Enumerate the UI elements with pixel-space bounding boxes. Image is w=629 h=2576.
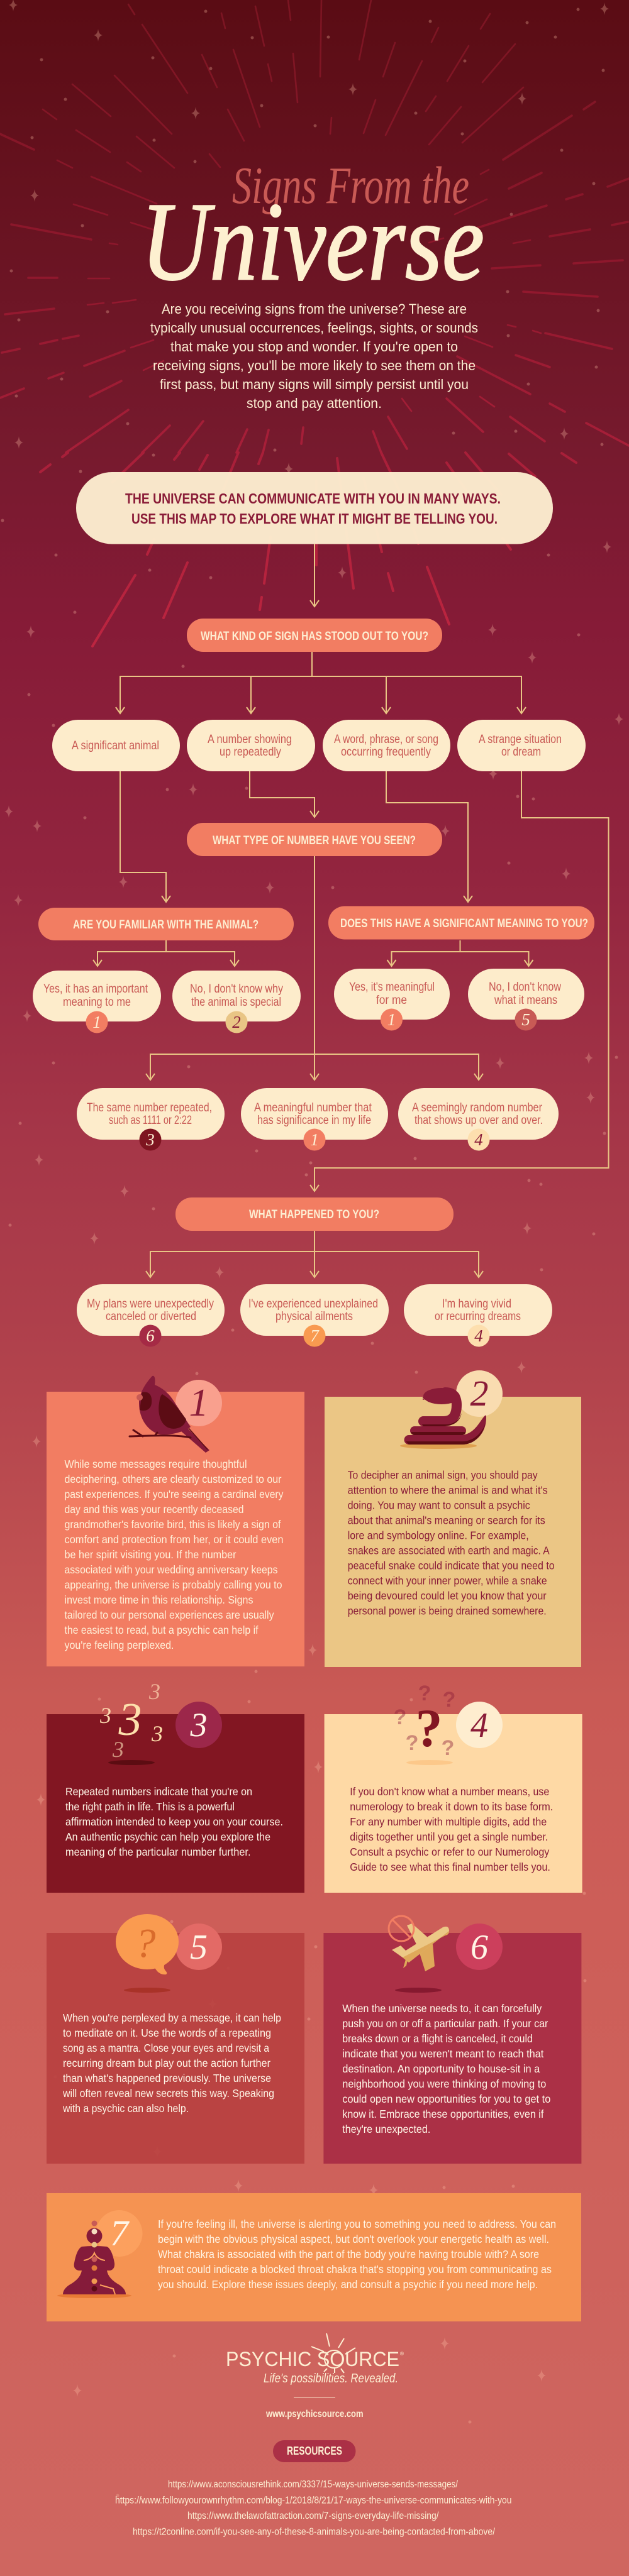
logo: Psychic Source: PSYCHIC SOURCE xyxy=(226,2348,399,2370)
panel 2 text: personal power is being drained somewhere. xyxy=(348,1605,547,1617)
question: what type of number: WHAT TYPE OF NUMBER HAVE YOU SEEN? xyxy=(213,834,416,847)
option: a seemingly random number xyxy=(398,1088,559,1150)
icon: coiled snake xyxy=(400,1388,486,1449)
option: yes, it's meaningful for me: 1 xyxy=(387,1010,396,1029)
option: yes, it has an important meaning: Yes, it has an important xyxy=(43,983,148,996)
icon: floating threes: 3 xyxy=(118,1694,142,1746)
option: a strange situation or dream: A strange situation xyxy=(479,733,562,746)
option: no, I don't know what it means xyxy=(468,969,584,1031)
question: what kind of sign: WHAT KIND OF SIGN HAS STOOD OUT TO YOU? xyxy=(201,630,428,643)
option: no, I don't know what it means: what it means xyxy=(494,994,557,1007)
panel 3 text: the right path in life. This is a powerful xyxy=(65,1800,235,1813)
icon: cardinal on a branch xyxy=(130,1376,209,1453)
logo: Psychic Source: Life's possibilities. Revealed. xyxy=(264,2372,398,2386)
badge 7: 7 xyxy=(110,2213,130,2254)
callout: map introduction: THE UNIVERSE CAN COMMUNICATE WITH YOU IN MANY WAYS. xyxy=(125,490,501,507)
arrows: sign type branches xyxy=(116,652,526,713)
option: unexplained physical ailments: physical ailments xyxy=(276,1310,353,1323)
panel 1 text: tailored to our personal experiences are usually xyxy=(64,1609,274,1621)
option: vivid or recurring dreams: I'm having vivid xyxy=(442,1297,511,1311)
option: the same number repeated: such as 1111 or 2:22 xyxy=(109,1114,192,1127)
badge 3: 3 xyxy=(190,1706,208,1744)
panel 2 text: connect with your inner power, while a snake xyxy=(348,1575,547,1587)
option: the same number repeated: 3 xyxy=(145,1130,155,1149)
panel 3 text: meaning of the particular number further. xyxy=(65,1846,250,1858)
arrow: number to number type question xyxy=(250,771,319,817)
icon: floating question marks: ? xyxy=(406,1731,418,1755)
icon: floating question marks: ? xyxy=(443,1688,455,1712)
panel 7: feeling ill xyxy=(47,2193,581,2321)
option: no, I don't know why the animal is special: No, I don't know why xyxy=(190,983,283,996)
panel 1 text: appearing, the universe is probably calling you to xyxy=(64,1578,282,1591)
panel 7 text: begin with the obvious physical aspect, but don't overlook your energetic health as well. xyxy=(158,2233,549,2245)
icon: floating question marks: ? xyxy=(418,1682,431,1705)
logo: Psychic Source xyxy=(226,2333,404,2386)
arrows: number type branches xyxy=(146,856,483,1080)
question: what type of number xyxy=(187,823,442,856)
background: radiating rays xyxy=(0,0,629,646)
panel 6 text: know it. Embrace these opportunities, even if xyxy=(342,2108,543,2120)
option: my plans were canceled: 6 xyxy=(146,1326,155,1345)
option: a number showing up repeatedly: A number showing xyxy=(208,733,292,746)
panel 6 text: push you on or off a particular path. If your car xyxy=(342,2017,548,2030)
panel 2 text: snakes are associated with earth and magic. A xyxy=(348,1544,550,1557)
panel 2 text: doing. You may want to consult a psychic xyxy=(348,1499,530,1512)
icon: floating question marks: ? xyxy=(415,1698,443,1758)
panel 6 text: neighborhood you were thinking of moving to xyxy=(342,2078,546,2090)
panel 2 text: lore and symbology online. For example, xyxy=(348,1529,529,1542)
panel 4 text: For any number with multiple digits, add the xyxy=(350,1815,547,1828)
option: a meaningful number: 1 xyxy=(310,1130,319,1149)
panel 2 text: being devoured could let you know that your xyxy=(348,1590,547,1602)
option: a meaningful number: has significance in my life xyxy=(257,1114,371,1127)
option: no, I don't know why the animal is special xyxy=(172,971,301,1033)
option: a word, phrase, or song: A word, phrase, or song xyxy=(334,733,438,746)
title: Signs From the Universe: Universe xyxy=(141,179,484,304)
panel 4: unknown number xyxy=(325,1682,582,1893)
question: are you familiar with the animal: ARE YOU FAMILIAR WITH THE ANIMAL? xyxy=(73,918,259,932)
option: unexplained physical ailments: 7 xyxy=(310,1326,320,1345)
badge 2 xyxy=(456,1370,503,1417)
badge 4: 4 xyxy=(470,1706,488,1745)
icon: floating threes: 3 xyxy=(112,1737,124,1762)
intro paragraph: stop and pay attention. xyxy=(247,395,382,411)
option: yes, it has an important meaning: meaning to me xyxy=(63,996,131,1009)
option: yes, it has an important meaning xyxy=(33,971,161,1033)
arrow: strange situation to what happened xyxy=(310,771,609,1191)
arrows: familiarity branches xyxy=(93,940,239,966)
panel 1 text xyxy=(64,1458,284,1651)
badge 1: 1 xyxy=(189,1382,209,1424)
option: a seemingly random number: A seemingly random number xyxy=(412,1101,543,1115)
icon: meditating figure with chakras xyxy=(57,2220,131,2298)
option: yes, it has an important meaning: 1 xyxy=(92,1013,101,1032)
icon: floating question marks: ? xyxy=(442,1736,454,1760)
option: no, I don't know what it means: No, I don't know xyxy=(489,981,561,994)
option: a number showing up repeatedly xyxy=(187,720,315,771)
option: my plans were canceled: canceled or diverted xyxy=(106,1310,196,1323)
panel 1 text: be her spirit visiting you. If the number xyxy=(64,1548,237,1561)
panel 4 text: If you don't know what a number means, use xyxy=(350,1785,549,1798)
icon: floating question marks: ? xyxy=(394,1705,406,1729)
badge 2: 2 xyxy=(470,1373,488,1414)
panel 1 text: invest more time in this relationship. Signs xyxy=(64,1593,253,1606)
option: my plans were canceled xyxy=(77,1284,225,1346)
icon: cancelled airplane xyxy=(389,1916,449,1993)
icon: speech bubble with question mark: ? xyxy=(135,1920,156,1966)
panel 6 text: When the universe needs to, it can forcefully xyxy=(342,2002,542,2015)
option: the same number repeated: The same number repeated, xyxy=(87,1101,212,1115)
intro paragraph: first pass, but many signs will simply persist until you xyxy=(160,377,469,392)
question: does this have a significant meaning xyxy=(328,906,594,939)
badge 6 xyxy=(456,1924,503,1970)
question: are you familiar with the animal xyxy=(38,908,294,940)
panel 5 text: will often reveal new secrets this way. Speaking xyxy=(62,2087,274,2100)
option: no, I don't know why the animal is special: 2 xyxy=(232,1013,241,1032)
option: yes, it's meaningful for me xyxy=(334,969,450,1031)
panel 6: forceful redirection xyxy=(323,1916,581,2164)
icon: floating threes: 3 xyxy=(148,1679,160,1704)
panel 2 text: peaceful snake could indicate that you need to xyxy=(348,1560,555,1572)
option: a significant animal: A significant animal xyxy=(72,739,159,752)
panel 5 text: to meditate on it. Use the words of a repeating xyxy=(63,2027,271,2039)
option: a significant animal xyxy=(52,720,180,771)
panel 7 text: What chakra is associated with the part of the body you're having trouble with? A sore xyxy=(158,2248,539,2260)
panel 6 text xyxy=(342,2002,550,2135)
panel 2 text: attention to where the animal is and what it's xyxy=(348,1484,548,1497)
option: yes, it's meaningful for me: Yes, it's meaningful xyxy=(349,981,435,994)
badge 1 xyxy=(175,1380,222,1426)
panel 1 text: past experiences. If you're seeing a cardinal every xyxy=(64,1488,284,1500)
resources list: https://www.aconsciousrethink.com/3337/15-ways-universe-sends-messages/ xyxy=(168,2479,458,2490)
option: a strange situation or dream: or dream xyxy=(501,746,541,759)
panel 5 text: with a psychic can also help. xyxy=(62,2102,189,2115)
panel 3: repeated numbers xyxy=(47,1679,304,1893)
intro paragraph: that make you stop and wonder. If you're open to xyxy=(170,339,458,355)
badge 5 xyxy=(175,1924,222,1970)
badge 4 xyxy=(456,1702,503,1748)
panel 5 text: song as a mantra. Close your eyes and revisit a xyxy=(63,2042,269,2054)
panel 3 text: affirmation intended to keep you on your course. xyxy=(65,1815,283,1828)
panel 6 text: they're unexpected. xyxy=(342,2123,430,2135)
resources list xyxy=(115,2479,512,2537)
panel 1 text: deciphering, others are clearly customized to our xyxy=(64,1473,282,1485)
option: a word, phrase, or song xyxy=(323,720,450,771)
panel 1 text: day and this was your recently deceased xyxy=(64,1503,244,1516)
panel 7 text xyxy=(158,2218,556,2291)
icon: floating question marks xyxy=(394,1682,455,1765)
option: the same number repeated xyxy=(77,1088,225,1150)
icon: floating threes: 3 xyxy=(99,1703,111,1728)
badge 3 xyxy=(175,1702,222,1748)
arrow: animal to familiarity question xyxy=(120,771,170,902)
badge 6: 6 xyxy=(470,1928,488,1967)
panel 6 text: indicate that you weren't meant to reach that xyxy=(342,2047,543,2060)
intro paragraph xyxy=(150,301,478,411)
panel 7 text: If you're feeling ill, the universe is alerting you to something you need to address. You can xyxy=(158,2218,556,2230)
panel 4 text: Consult a psychic or refer to our Numerology xyxy=(350,1846,550,1858)
option: a number showing up repeatedly: up repeatedly xyxy=(220,746,281,759)
panel 3 text: Repeated numbers indicate that you're on xyxy=(65,1785,252,1798)
resources list: https://www.followyourownrhythm.com/blog-1/2018/8/21/17-ways-the-universe-communicates-with-you xyxy=(115,2496,512,2506)
option: vivid or recurring dreams: or recurring dreams xyxy=(435,1310,521,1323)
panel 1: cardinal xyxy=(47,1376,304,1666)
logo: Psychic Source: ® xyxy=(400,2351,404,2357)
resources list: https://t2conline.com/if-you-see-any-of-these-8-animals-you-are-being-contacted-from-above/ xyxy=(133,2527,495,2537)
panel 1 text: you're feeling perplexed. xyxy=(64,1639,174,1651)
option: a seemingly random number: 4 xyxy=(474,1130,483,1149)
website address: www.psychicsource.com xyxy=(265,2409,364,2419)
arrows: meaning branches xyxy=(387,940,533,966)
option: my plans were canceled: My plans were unexpectedly xyxy=(87,1297,214,1311)
resources list: https://www.thelawofattraction.com/7-signs-everyday-life-missing/ xyxy=(187,2511,439,2521)
resources heading: RESOURCES xyxy=(287,2445,342,2457)
panel 1 text: associated with your wedding anniversary keeps xyxy=(64,1563,278,1576)
arrow: word to meaning question xyxy=(386,771,472,902)
arrow: intro to first question xyxy=(310,544,319,607)
option: a word, phrase, or song: occurring frequently xyxy=(341,746,431,759)
option: vivid or recurring dreams xyxy=(404,1284,552,1346)
option: no, I don't know what it means: 5 xyxy=(521,1010,530,1029)
panel 7 text: you should. Explore these issues deeply, and consult a psychic if you need more help. xyxy=(158,2278,538,2291)
panel 5 text: recurring dream but play out the action further xyxy=(63,2057,270,2069)
option: no, I don't know why the animal is special: the animal is special xyxy=(191,996,281,1009)
intro paragraph: receiving signs, you'll be more likely to see them on the xyxy=(153,358,476,373)
callout: map introduction xyxy=(76,472,553,544)
panel 2 text: about that animal's meaning or search for its xyxy=(348,1514,545,1527)
intro paragraph: Are you receiving signs from the universe? These are xyxy=(162,301,467,317)
icon: speech bubble with question mark xyxy=(116,1914,179,1993)
question: what happened to you xyxy=(175,1197,454,1231)
option: unexplained physical ailments xyxy=(240,1284,389,1346)
badge 5: 5 xyxy=(190,1928,208,1967)
panel 2 text: To decipher an animal sign, you should pay xyxy=(348,1469,538,1482)
panel 5: perplexed by a message xyxy=(47,1914,304,2164)
panel 1 text: comfort and protection from her, or it could even xyxy=(64,1533,283,1546)
panel 5 text: When you're perplexed by a message, it can help xyxy=(63,2012,281,2024)
panel 1 text: grandmother's favorite bird, this is likely a sign of xyxy=(64,1518,281,1531)
panel 5 text: than what's happened previously. The universe xyxy=(63,2072,271,2084)
question: what kind of sign xyxy=(187,619,442,652)
panel 2 text xyxy=(348,1469,555,1617)
panel 6 text: destination. An opportunity to house-sit in a xyxy=(342,2062,540,2075)
option: a meaningful number: A meaningful number that xyxy=(254,1101,372,1115)
option: yes, it's meaningful for me: for me xyxy=(376,994,407,1007)
panel 3 text: An authentic psychic can help you explore the xyxy=(65,1830,270,1843)
title: Signs From the Universe: Signs From the xyxy=(232,157,469,215)
panel 1 text: While some messages require thoughtful xyxy=(64,1458,247,1470)
panel 3 text xyxy=(65,1785,283,1858)
panel 4 text: digits together until you get a single number. xyxy=(350,1830,548,1843)
panel 2: snake xyxy=(325,1370,581,1667)
arrows: what happened branches xyxy=(146,1231,483,1277)
panel 4 text xyxy=(350,1785,553,1873)
option: vivid or recurring dreams: 4 xyxy=(474,1326,483,1345)
badge 7 xyxy=(96,2210,142,2257)
panel 4 text: numerology to break it down to its base form. xyxy=(350,1800,553,1813)
icon: floating threes: 3 xyxy=(151,1721,163,1746)
panel 1 text: the easiest to read, but a psychic can help if xyxy=(64,1624,259,1636)
option: a meaningful number xyxy=(241,1088,388,1150)
panel 4 text: Guide to see what this final number tells you. xyxy=(350,1861,550,1873)
intro paragraph: typically unusual occurrences, feelings, sights, or sounds xyxy=(150,320,478,336)
callout: map introduction: USE THIS MAP TO EXPLORE WHAT IT MIGHT BE TELLING YOU. xyxy=(131,510,498,527)
question: what happened to you: WHAT HAPPENED TO YOU? xyxy=(249,1208,379,1221)
panel 5 text xyxy=(62,2012,281,2115)
panel 7 text: throat could indicate a blocked throat chakra that's stopping you from communicating as xyxy=(158,2263,552,2276)
panel 6 text: breaks down or a flight is canceled, it could xyxy=(342,2032,533,2045)
resources heading xyxy=(273,2440,356,2462)
option: unexplained physical ailments: I've experienced unexplained xyxy=(248,1297,378,1311)
icon: floating threes xyxy=(99,1679,163,1765)
option: a strange situation or dream xyxy=(457,720,586,771)
panel 6 text: could open new opportunities for you to get to xyxy=(342,2093,550,2105)
option: a seemingly random number: that shows up over and over. xyxy=(415,1114,543,1127)
